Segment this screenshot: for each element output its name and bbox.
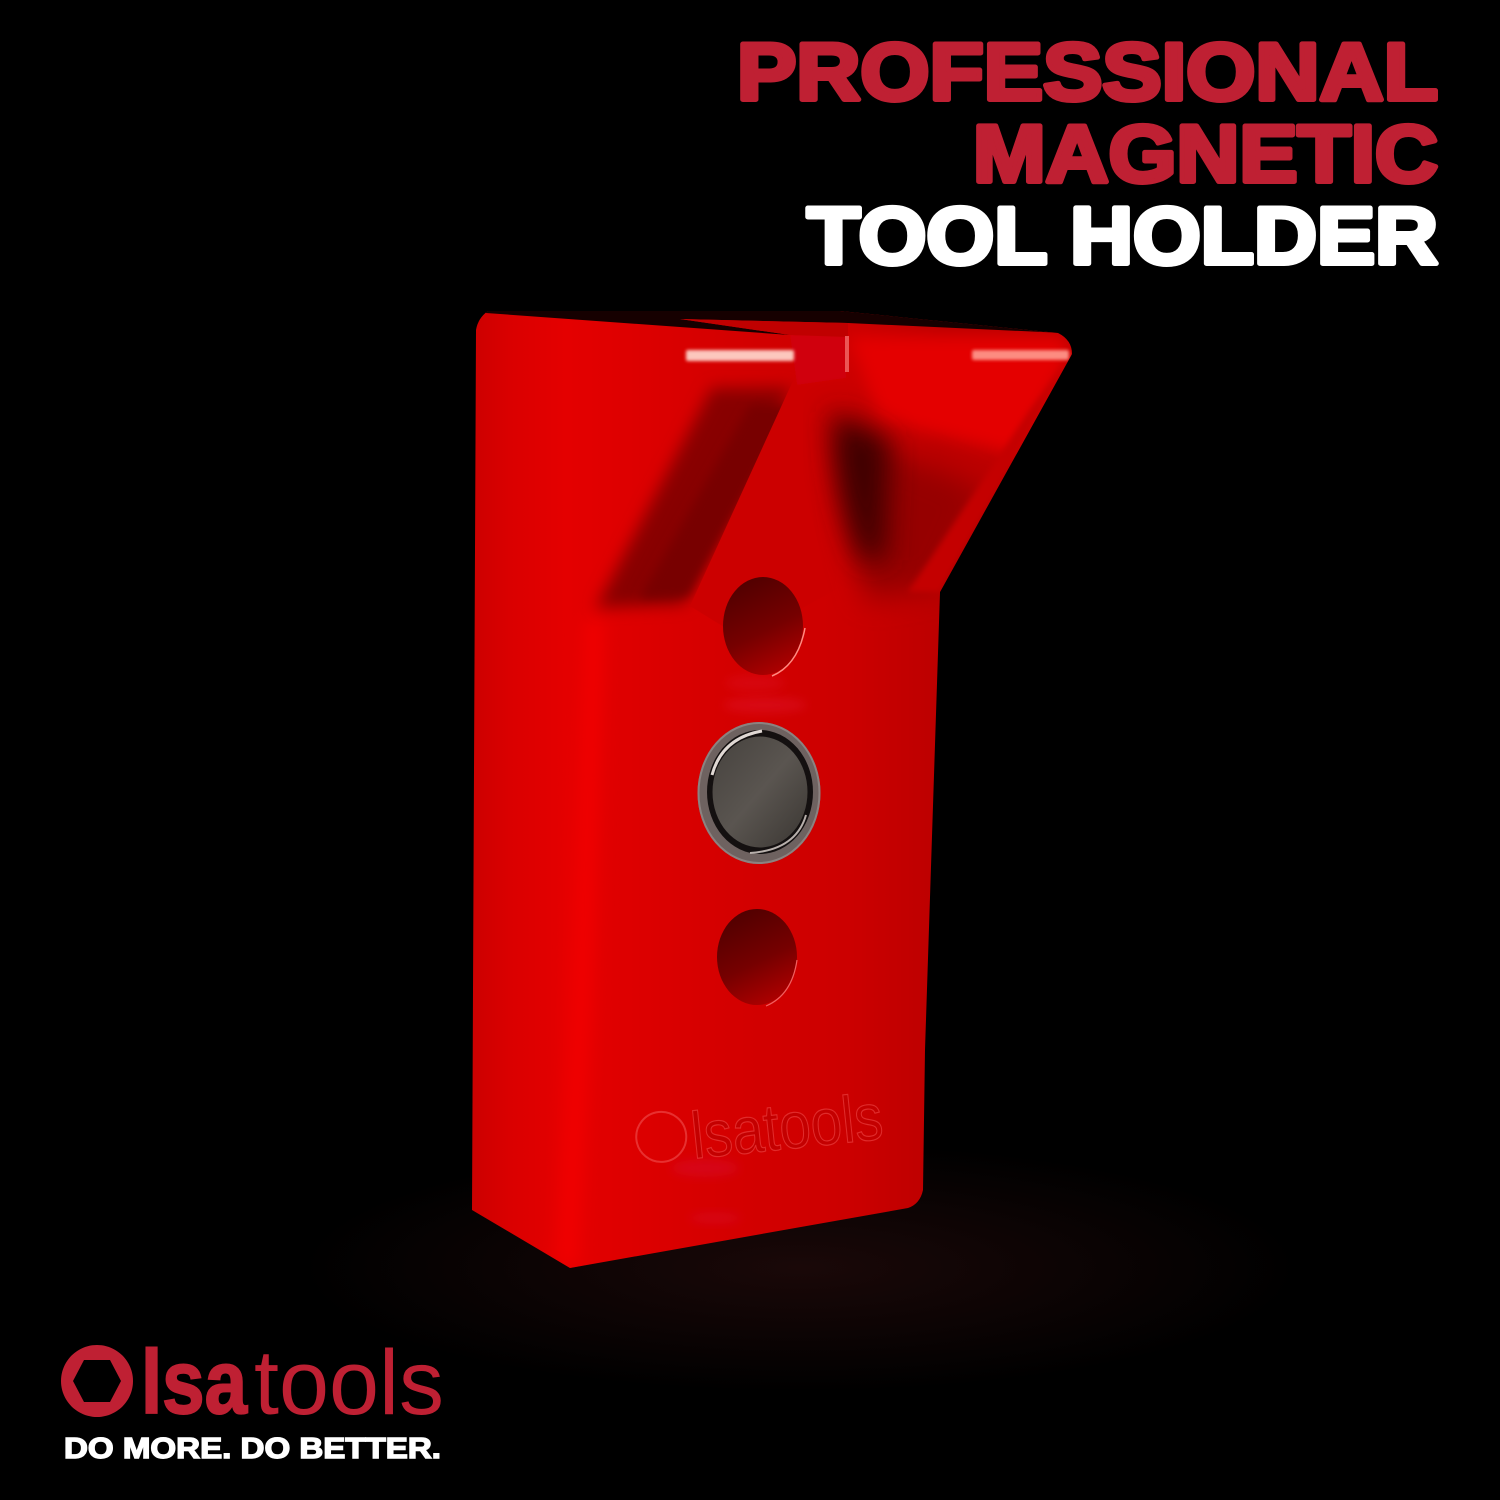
right flap diagonal lit strip — [908, 354, 1072, 592]
deep shadow core — [832, 410, 890, 560]
ridge highlight — [845, 336, 849, 372]
front edge glow — [556, 620, 604, 1265]
tagline: DO MORE. DO BETTER. — [64, 1433, 441, 1465]
wordmark light part: tools — [254, 1332, 444, 1434]
magnet — [698, 722, 820, 864]
floor surface — [0, 1100, 1500, 1400]
top dark surface — [486, 309, 1064, 335]
smudges — [723, 697, 807, 713]
icon: hexagon O — [61, 1345, 133, 1417]
logo: Olsatools — [61, 1332, 444, 1434]
embossed brand on holder: lsatools — [687, 1079, 886, 1173]
right flap face — [848, 335, 1072, 455]
upper screw hole — [723, 577, 805, 676]
slot wall — [790, 335, 846, 385]
holder body — [460, 300, 1080, 1280]
right underside shadow — [842, 430, 985, 600]
product: red magnetic tool holder — [460, 300, 1080, 1280]
gloss highlights — [686, 350, 794, 361]
left flap shadow — [596, 388, 792, 608]
lit wedge right of the slot edge — [694, 386, 798, 626]
lower screw hole — [717, 909, 797, 1006]
embossed brand on holder — [633, 1079, 886, 1178]
top red sliver — [680, 319, 848, 337]
wordmark bold part: lsa — [141, 1333, 248, 1433]
title line: TOOL HOLDER: TOOL HOLDER — [807, 192, 1438, 282]
title — [737, 28, 1438, 282]
title line: PROFESSIONAL: PROFESSIONAL — [737, 28, 1438, 118]
title line: MAGNETIC: MAGNETIC — [973, 110, 1438, 200]
